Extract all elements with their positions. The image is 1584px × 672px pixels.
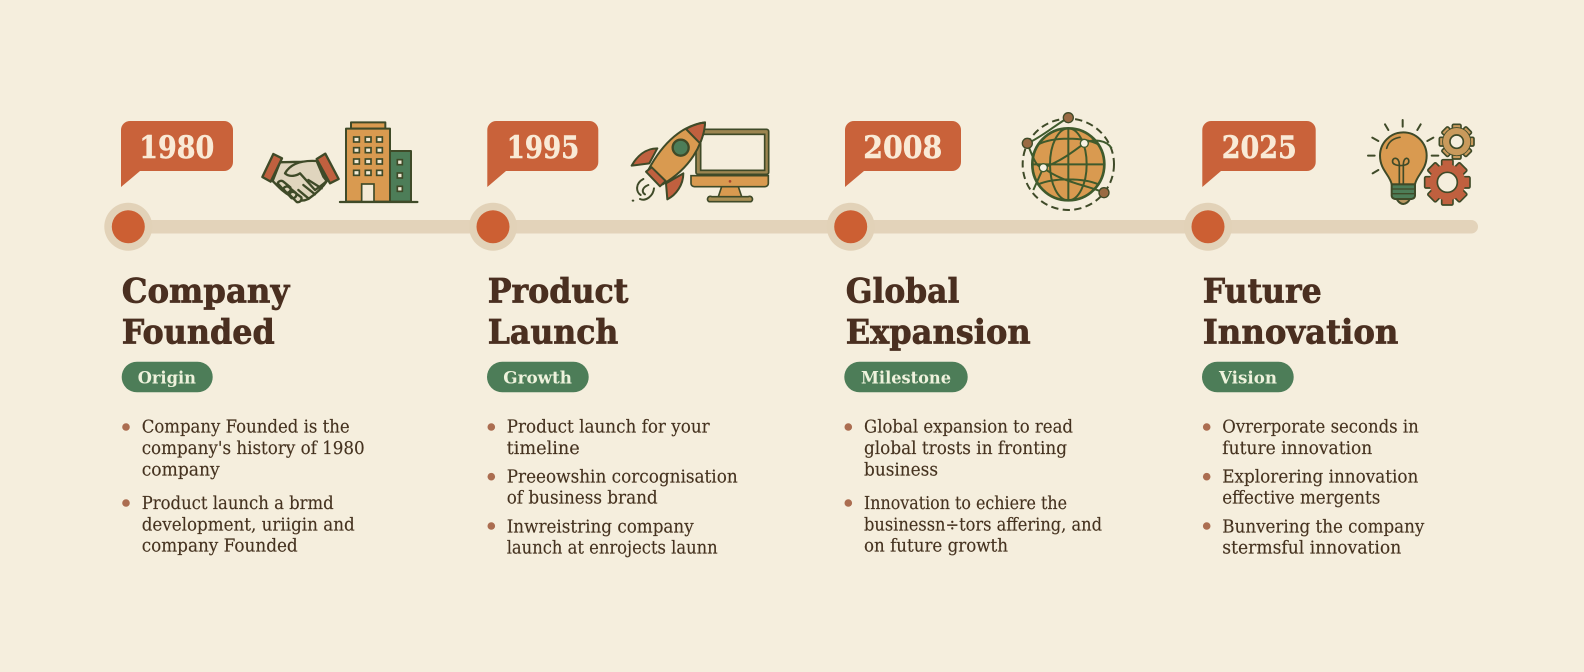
heading: Expansion [846,312,1031,352]
icon: rocket and monitor [632,122,769,202]
bullet list: Global expansion to read [864,418,1073,438]
bullet list: Explorering innovation [1222,468,1418,488]
bullet list: on future growth [864,537,1008,557]
heading [122,272,290,352]
year bubble: 2008 [845,121,961,187]
bullet list: company [142,461,220,481]
bullet list: stermsful innovation [1222,538,1401,558]
bullet list: company's history of 1980 [142,439,365,459]
bullet list: Preeowshin corcognisation [507,468,738,488]
heading [488,272,629,352]
icon: handshake and office building [262,122,417,202]
node marker [469,203,517,251]
bullet list: development, uriigin and [142,516,355,536]
year bubble: 1995: 1995 [507,130,579,166]
bullet list: Ovrerporate seconds in [1222,418,1419,438]
bullet list [122,418,365,557]
bullet list: future innovation [1222,439,1372,459]
tag: Vision [1202,362,1294,392]
year bubble: 2025: 2025 [1222,130,1297,166]
heading [1203,272,1398,352]
bullet list [844,418,1102,557]
heading: Future [1203,272,1322,312]
tag: Origin [122,362,213,392]
node marker [104,203,152,251]
icon: globe with network [1022,113,1114,210]
node marker [1184,203,1232,251]
bullet list: Company Founded is the [142,418,350,438]
bullet list [488,418,738,558]
tag: Milestone: Milestone [861,368,951,387]
year bubble: 1980 [121,121,233,187]
year bubble: 1995 [487,121,598,187]
year bubble: 2025 [1202,121,1316,187]
tag: Origin: Origin [138,368,196,387]
column: 1980 Company Founded [104,121,417,557]
bullet list: Bunvering the company [1222,518,1424,538]
timeline bar [128,220,1478,234]
tag: Milestone [844,362,968,392]
column: 2025 Future Innovation [1184,120,1474,558]
column: 2008 Global Expansion [827,113,1114,557]
heading: Global [846,272,959,312]
year bubble: 1980: 1980 [139,130,214,166]
bullet list: Product launch for your [507,418,710,438]
bullet list: launch at enrojects launn [507,538,718,558]
year bubble: 2008: 2008 [863,130,942,166]
bullet list: global trosts in fronting [864,439,1067,459]
heading: Product [488,272,629,312]
bullet list: of business brand [507,488,658,508]
tag: Vision: Vision [1218,368,1277,387]
bullet list [1203,418,1424,558]
heading [846,272,1031,352]
bullet list: company Founded [142,537,298,557]
tag: Growth [487,362,589,392]
icon: light bulb and gears [1368,120,1474,205]
bullet list: Inwreistring company [507,518,694,538]
bullet list: effective mergents [1222,488,1380,508]
node marker [827,203,875,251]
bullet list: business [864,461,938,481]
heading: Founded [122,312,275,352]
bullet list: Innovation to echiere the [864,494,1067,514]
heading: Innovation [1203,312,1398,352]
tag: Growth: Growth [503,368,572,387]
bullet list: timeline [507,439,580,459]
heading: Launch [488,312,618,352]
bullet list: Product launch a brmd [142,494,334,514]
heading: Company [122,272,290,312]
bullet list: businessn÷tors affering, and [864,516,1102,536]
column: 1995 Product Launch [469,121,769,558]
